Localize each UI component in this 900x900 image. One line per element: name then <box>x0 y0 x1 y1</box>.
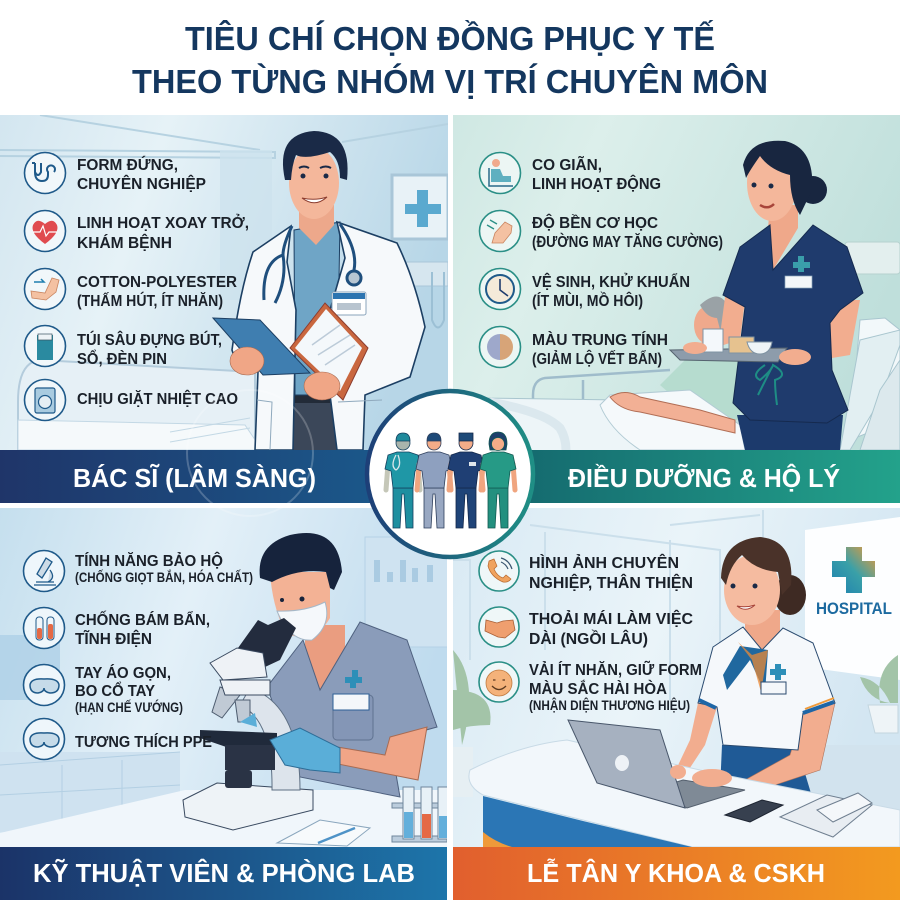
icon: handshake <box>479 607 519 647</box>
smartphone <box>725 800 783 822</box>
text: màu trung tính: MÀU TRUNG TÍNH <box>532 330 668 349</box>
microscope: eyepieces <box>238 618 296 667</box>
icon: hands <box>480 210 520 252</box>
nurse: left arm <box>700 296 744 345</box>
text: màu trung tính: (GIẢM LỘ VẾT BẨN) <box>532 349 662 368</box>
banner: kỹ thuật viên: KỸ THUẬT VIÊN & PHÒNG LAB <box>33 858 415 888</box>
microscope: stage support <box>225 745 275 770</box>
reception desk <box>469 740 900 847</box>
text: vải ít nhăn: MÀU SẮC HÀI HÒA <box>529 679 667 698</box>
nurse: apron tie <box>756 365 782 405</box>
microscope <box>183 618 313 830</box>
title <box>132 20 768 100</box>
banner: lễ tân <box>453 847 900 900</box>
text: form đứng <box>77 155 206 193</box>
text: tính năng bảo hộ <box>75 551 253 585</box>
receptionist: bun <box>774 575 806 615</box>
text: cotton-polyester: COTTON-POLYESTER <box>77 274 237 291</box>
nurse <box>670 141 863 450</box>
text: form đứng: FORM ĐỨNG, <box>77 155 178 174</box>
nurse: trousers <box>737 415 843 450</box>
nurse: hands <box>683 342 811 365</box>
doctor: stethoscope <box>264 224 361 303</box>
doctor: face <box>289 147 339 219</box>
plant: left <box>453 650 491 797</box>
patient: blanket <box>600 390 745 450</box>
technician: scrub top <box>267 622 437 797</box>
paper and pen <box>277 820 370 846</box>
panel: bác sĩ <box>0 115 448 503</box>
lab desk <box>0 790 447 847</box>
microscope: focus knob <box>225 770 252 788</box>
center medallion: team <box>187 390 533 557</box>
patient: arm <box>610 392 735 433</box>
receptionist <box>672 537 835 800</box>
figure: navy scrubs <box>448 433 484 528</box>
text: hình ảnh: HÌNH ẢNH CHUYÊN <box>529 553 679 572</box>
text: tay áo gọn: TAY ÁO GỌN, <box>75 663 171 682</box>
banner: điều dưỡng <box>453 450 900 503</box>
doctor: white coat <box>232 222 425 450</box>
icon: heart <box>24 210 66 252</box>
text: form đứng: CHUYÊN NGHIỆP <box>77 174 206 193</box>
microscope: stage <box>200 730 277 750</box>
patient: hair <box>700 296 724 345</box>
microscope: arm <box>240 688 300 790</box>
panel: lễ tân <box>453 508 900 900</box>
text: vải ít nhăn: VẢI ÍT NHĂN, GIỮ FORM <box>529 659 702 679</box>
receptionist: face <box>724 555 780 625</box>
sign: cross logo <box>832 547 875 593</box>
receptionist: facial features <box>730 584 758 609</box>
hospital bed <box>18 360 262 450</box>
patient: gown <box>660 355 740 420</box>
technician: face <box>270 572 330 638</box>
text: vệ sinh <box>532 272 690 310</box>
doctor: belt <box>294 396 330 403</box>
technician: mask <box>277 602 327 640</box>
text: độ bền: ĐỘ BỀN CƠ HỌC <box>532 213 658 232</box>
text: chống bám bẩn: CHỐNG BÁM BẨN, <box>75 609 210 629</box>
icon: seated person <box>480 152 520 194</box>
receptionist: right arm <box>745 703 835 790</box>
icon: test tubes <box>24 608 64 648</box>
receptionist: hands <box>670 765 732 787</box>
microscope: objectives <box>212 687 250 722</box>
text: túi sâu: TÚI SÂU ĐỰNG BÚT, <box>77 330 222 349</box>
text: vải ít nhăn: (NHẬN DIỆN THƯƠNG HIỆU) <box>529 698 690 713</box>
text: độ bền <box>532 213 723 251</box>
text: chống bám bẩn <box>75 609 210 648</box>
text: hình ảnh: NGHIỆP, THÂN THIỆN <box>529 573 693 592</box>
text: vệ sinh: VỆ SINH, KHỬ KHUẨN <box>532 272 690 291</box>
text: chịu giặt: CHỊU GIẶT NHIỆT CAO <box>77 389 238 408</box>
text: co giãn <box>532 154 661 193</box>
desk front panel <box>483 796 692 847</box>
icon: neutral colour <box>480 326 520 368</box>
text: linh hoạt <box>77 213 249 252</box>
criteria: điều dưỡng <box>480 152 723 368</box>
icon: clock <box>480 268 520 310</box>
microscope: base <box>183 783 313 830</box>
laptop <box>568 720 745 808</box>
receptionist: scarf <box>723 642 768 693</box>
doctor: trousers <box>294 403 336 450</box>
text: tương thích ppe: TƯƠNG THÍCH PPE <box>75 732 212 751</box>
bowl and dish <box>729 337 772 354</box>
technician: forearm <box>333 727 427 780</box>
nurse: badge and logo <box>785 256 812 288</box>
criteria: bác sĩ <box>24 152 249 420</box>
nurse: neck <box>768 205 798 270</box>
nurse: scrub top <box>723 225 863 423</box>
technician: pocket and badge <box>333 670 373 740</box>
technician: hair <box>260 533 342 590</box>
technician: eyes <box>280 596 304 602</box>
wall picture <box>392 175 448 239</box>
receptionist: hair <box>721 537 791 595</box>
text: túi sâu <box>77 330 222 368</box>
text: độ bền: (ĐƯỜNG MAY TĂNG CƯỜNG) <box>532 232 723 251</box>
left monitor <box>0 635 60 700</box>
back counter <box>790 745 900 815</box>
text: cotton-polyester: (THẤM HÚT, ÍT NHĂN) <box>77 291 223 310</box>
glove <box>270 728 340 773</box>
patient: head <box>694 308 720 342</box>
doctor: right hand <box>304 372 340 400</box>
icon: stethoscope <box>24 152 66 194</box>
glove: left hand <box>240 713 257 727</box>
text: cotton-polyester <box>77 274 237 310</box>
icon: pocket notebook <box>24 326 66 366</box>
receptionist: sleeve bands <box>699 698 834 713</box>
desk telephone <box>780 793 872 837</box>
receptionist: badge and logo <box>761 664 786 694</box>
wall equipment <box>406 262 448 328</box>
doctor: left hand <box>230 347 264 375</box>
banner: lễ tân: LỄ TÂN Y KHOA & CSKH <box>527 858 825 888</box>
banner: điều dưỡng: ĐIỀU DƯỠNG & HỘ LÝ <box>568 463 840 493</box>
text: thoải mái: THOẢI MÁI LÀM VIỆC <box>529 609 693 628</box>
receptionist: skirt <box>720 745 813 800</box>
microscope: head <box>210 648 270 695</box>
nurse: face <box>747 156 794 221</box>
text: màu trung tính <box>532 330 668 368</box>
text: vải ít nhăn <box>529 659 702 713</box>
tray <box>670 348 787 362</box>
title: TIÊU CHÍ CHỌN ĐỒNG PHỤC Y TẾ <box>185 20 715 57</box>
title: THEO TỪNG NHÓM VỊ TRÍ CHUYÊN MÔN <box>132 62 768 100</box>
hospital sign <box>805 517 900 680</box>
receptionist: left arm <box>672 703 717 783</box>
doctor <box>213 131 425 450</box>
text: tay áo gọn <box>75 663 183 715</box>
panel: kỹ thuật viên <box>0 508 449 900</box>
sign: hospital text: HOSPITAL <box>816 599 892 618</box>
panel: điều dưỡng <box>453 115 900 503</box>
text: co giãn: LINH HOẠT ĐỘNG <box>532 174 661 193</box>
plant: right <box>860 655 898 733</box>
icon: phone <box>479 551 519 591</box>
watermark ring <box>187 390 313 516</box>
text: tay áo gọn: (HẠN CHẾ VƯỚNG) <box>75 700 183 715</box>
doctor: hair <box>283 131 348 180</box>
text: túi sâu: SỔ, ĐÈN PIN <box>77 349 167 368</box>
text: tay áo gọn: BO CỔ TAY <box>75 681 155 700</box>
patient bed <box>488 318 900 450</box>
banner: bác sĩ: BÁC SĨ (LÂM SÀNG) <box>73 463 316 493</box>
criteria: kỹ thuật viên <box>24 550 253 760</box>
text: thoải mái: DÀI (NGỒI LÂU) <box>529 629 648 648</box>
text: tính năng bảo hộ: TÍNH NĂNG BẢO HỘ <box>75 551 223 570</box>
icon: goggles ppe <box>24 718 64 760</box>
test tube rack <box>392 787 449 842</box>
cup <box>703 329 723 352</box>
text: co giãn: CO GIÃN, <box>532 154 602 174</box>
icon: smile <box>479 662 519 702</box>
doctor: facial features <box>299 166 331 203</box>
doctor: badge <box>332 292 366 315</box>
nurse: right arm <box>830 300 860 358</box>
nurse: hair <box>743 141 812 215</box>
text: linh hoạt: KHÁM BỆNH <box>77 233 172 252</box>
criteria: lễ tân <box>479 551 702 713</box>
doctor: clipboard <box>213 318 310 375</box>
text: hình ảnh <box>529 553 693 592</box>
doctor: neck <box>299 205 334 245</box>
figure: teal scrubs <box>385 433 421 528</box>
banner: kỹ thuật viên <box>0 847 447 900</box>
nurse: hair bun <box>806 176 827 204</box>
figure: green scrubs <box>480 432 516 528</box>
icon: arm <box>24 268 66 310</box>
doctor: shirt <box>294 222 340 395</box>
doctor: coat pockets <box>257 400 382 450</box>
text: linh hoạt: LINH HOẠT XOAY TRỞ, <box>77 213 249 232</box>
technician <box>260 533 437 797</box>
figure: grey scrubs <box>416 433 452 528</box>
text: thoải mái <box>529 609 693 648</box>
medallion circle <box>367 391 533 557</box>
receptionist: shirt <box>698 627 835 750</box>
curtain <box>220 150 272 262</box>
lab cabinets <box>0 752 180 832</box>
wall chart panel <box>365 537 449 647</box>
doctor: folder <box>290 303 368 400</box>
icon: washing machine <box>24 380 66 420</box>
text: chống bám bẩn: TĨNH ĐIỆN <box>75 628 152 648</box>
text: tính năng bảo hộ: (CHỐNG GIỌT BẮN, HÓA CHẤT) <box>75 570 253 585</box>
icon: microscope small <box>24 550 64 592</box>
icon: goggles <box>24 664 64 706</box>
banner: bác sĩ <box>0 450 370 503</box>
nurse: facial features <box>752 182 774 207</box>
text: vệ sinh: (ÍT MÙI, MỒ HÔI) <box>532 291 643 310</box>
wall console <box>845 242 900 274</box>
patient <box>600 296 745 450</box>
receptionist: neck <box>745 610 780 650</box>
technician: neck <box>305 625 345 690</box>
window frames <box>453 510 763 700</box>
